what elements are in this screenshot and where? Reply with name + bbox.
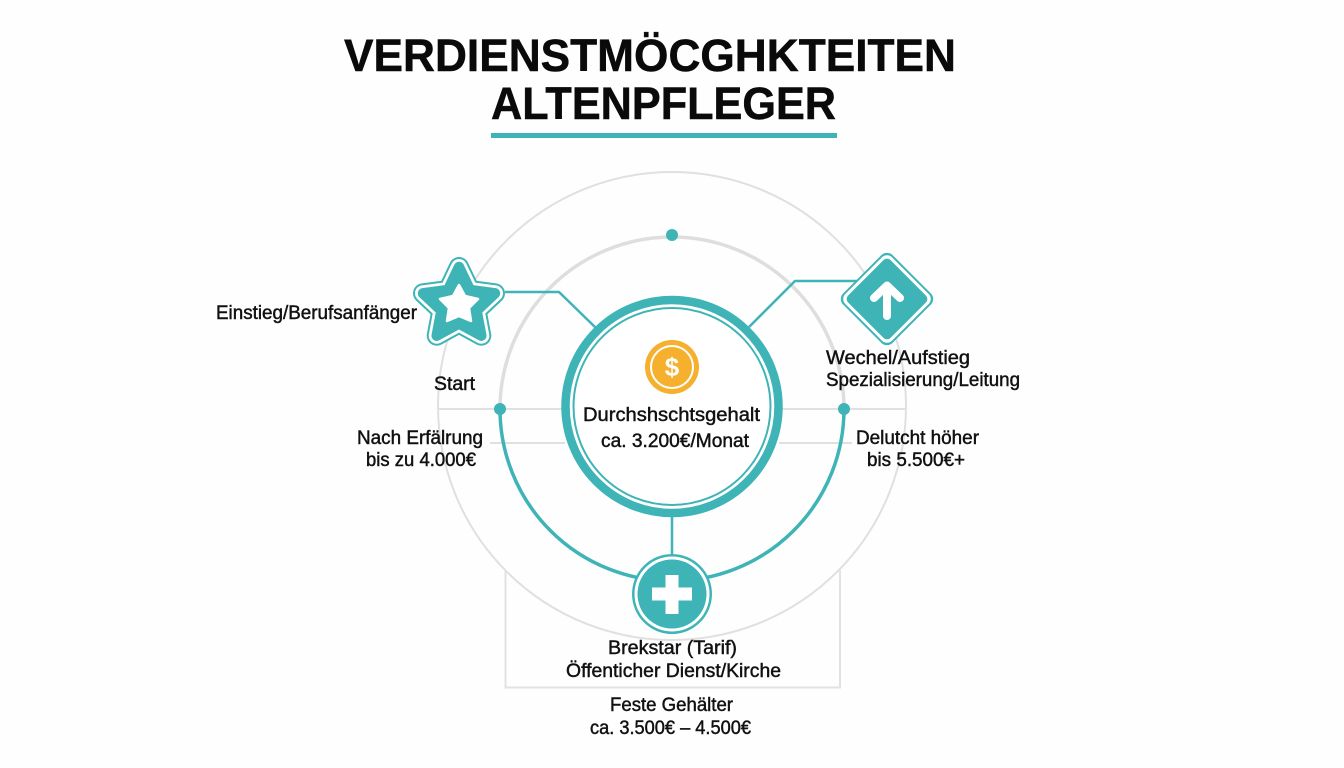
grey bracket bbox=[506, 570, 840, 688]
label: change and promotion bbox=[826, 348, 1020, 391]
icon: diamond arrow bbox=[838, 250, 936, 348]
label: experience: Nach Erfälrung bbox=[357, 428, 483, 449]
arc dots bbox=[494, 229, 850, 415]
label: change and promotion: Wechel/Aufstieg bbox=[826, 348, 970, 369]
connector right bbox=[749, 281, 858, 327]
label: change and promotion: Spezialisierung/Leitung bbox=[826, 370, 1020, 391]
connector bottom bbox=[671, 515, 673, 558]
label: collective tariff: Brekstar (Tarif) bbox=[608, 638, 737, 659]
title: VERDIENSTMÖCGHKTEITEN bbox=[344, 30, 956, 81]
grey guide lines bbox=[438, 409, 906, 443]
label: collective tariff bbox=[566, 638, 781, 682]
connector left bbox=[505, 292, 596, 328]
icon: star bbox=[423, 267, 495, 336]
icon: coin bbox=[645, 340, 699, 394]
title bbox=[344, 30, 956, 129]
label: entry: Einstieg/Berufsanfänger bbox=[216, 303, 418, 324]
label: experience bbox=[357, 428, 483, 471]
icon: medical cross bbox=[632, 554, 712, 634]
label: collective tariff: Öffenticher Dienst/Kirche bbox=[566, 661, 781, 682]
label: higher pay: bis 5.500€+ bbox=[867, 450, 965, 471]
outer grey ring bbox=[438, 172, 906, 640]
label: fixed salaries bbox=[590, 695, 751, 739]
label: start: Start bbox=[434, 374, 476, 395]
central text: Durchshschtsgehalt bbox=[583, 405, 761, 426]
label: fixed salaries: ca. 3.500€ – 4.500€ bbox=[590, 718, 751, 739]
central circle bbox=[566, 300, 778, 513]
icon: coin: $ bbox=[665, 352, 680, 382]
label: experience: bis zu 4.000€ bbox=[366, 450, 476, 471]
teal lower arc bbox=[500, 409, 844, 581]
title underline bbox=[491, 133, 837, 138]
central text: ca. 3.200€/Monat bbox=[601, 431, 750, 452]
central text bbox=[583, 405, 761, 452]
inner grey arc bbox=[500, 237, 844, 409]
label: higher pay bbox=[856, 428, 980, 471]
label: fixed salaries: Feste Gehälter bbox=[610, 695, 734, 716]
label: higher pay: Delutcht höher bbox=[856, 428, 980, 449]
title: ALTENPFLEGER bbox=[491, 78, 836, 129]
